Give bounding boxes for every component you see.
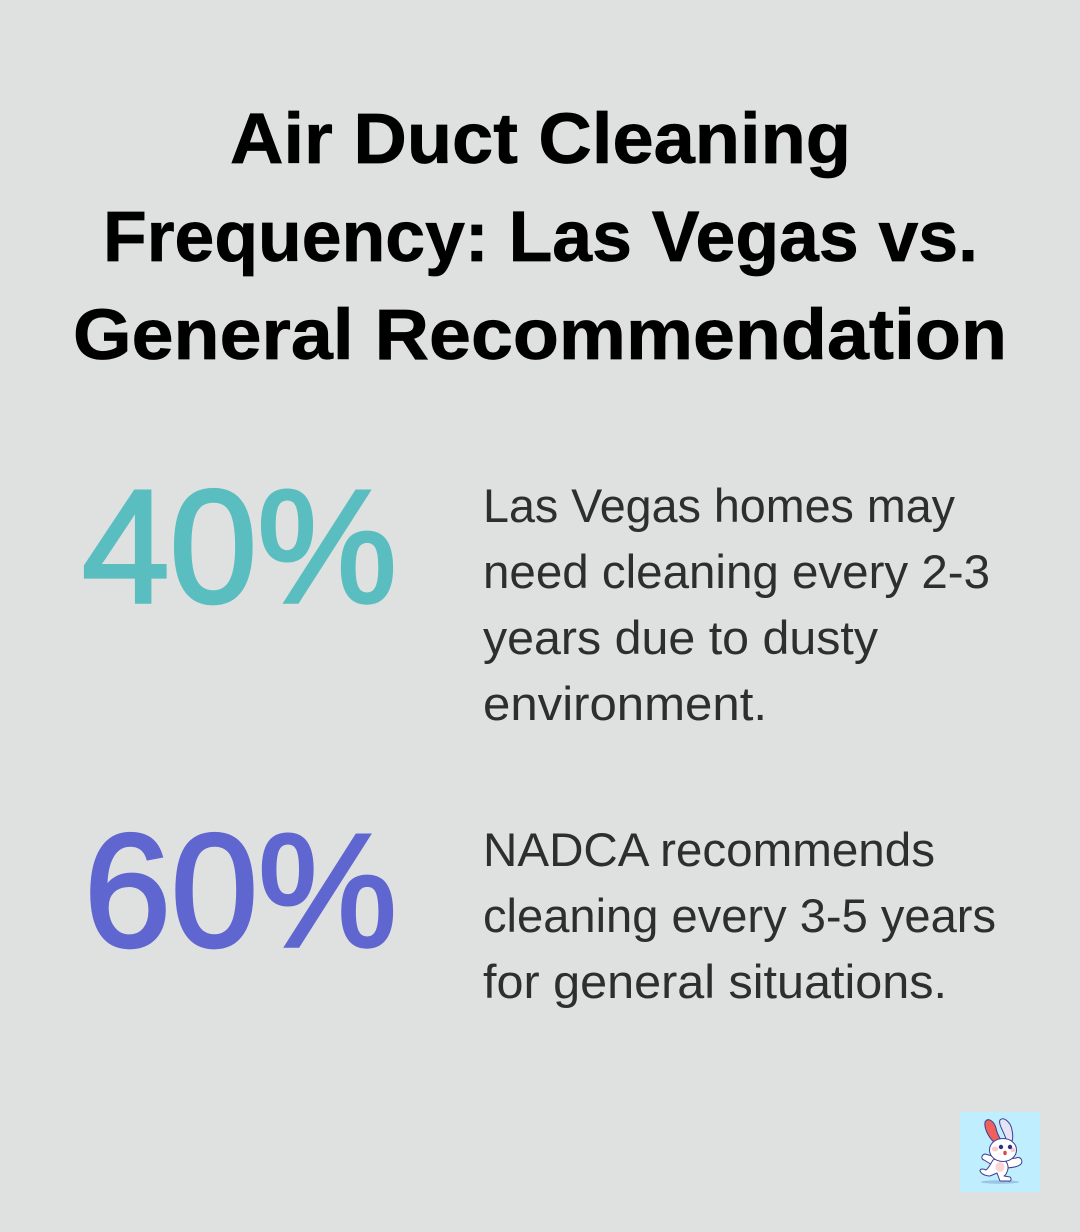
text block: Las Vegas description: years due to dusty [483,611,879,664]
statistic: 60%: 60% [84,801,397,981]
text block: Las Vegas description: environment. [483,677,767,730]
statistic: 40%: 40% [82,457,397,637]
text block: Las Vegas description: Las Vegas homes may [483,479,955,532]
title: General Recommendation [73,296,1007,375]
text block: NADCA description [483,823,996,1008]
title: Frequency: Las Vegas vs. [103,198,978,277]
icon: running rabbit logo [960,1112,1040,1192]
text block: NADCA description: NADCA recommends [483,823,935,876]
text block: NADCA description: cleaning every 3-5 years [483,889,996,942]
text block: NADCA description: for general situations. [483,955,947,1008]
text block: Las Vegas description [483,479,990,730]
text block: Las Vegas description: need cleaning every 2-3 [483,545,990,598]
title: Air Duct Cleaning [230,100,851,179]
title [73,100,1007,375]
